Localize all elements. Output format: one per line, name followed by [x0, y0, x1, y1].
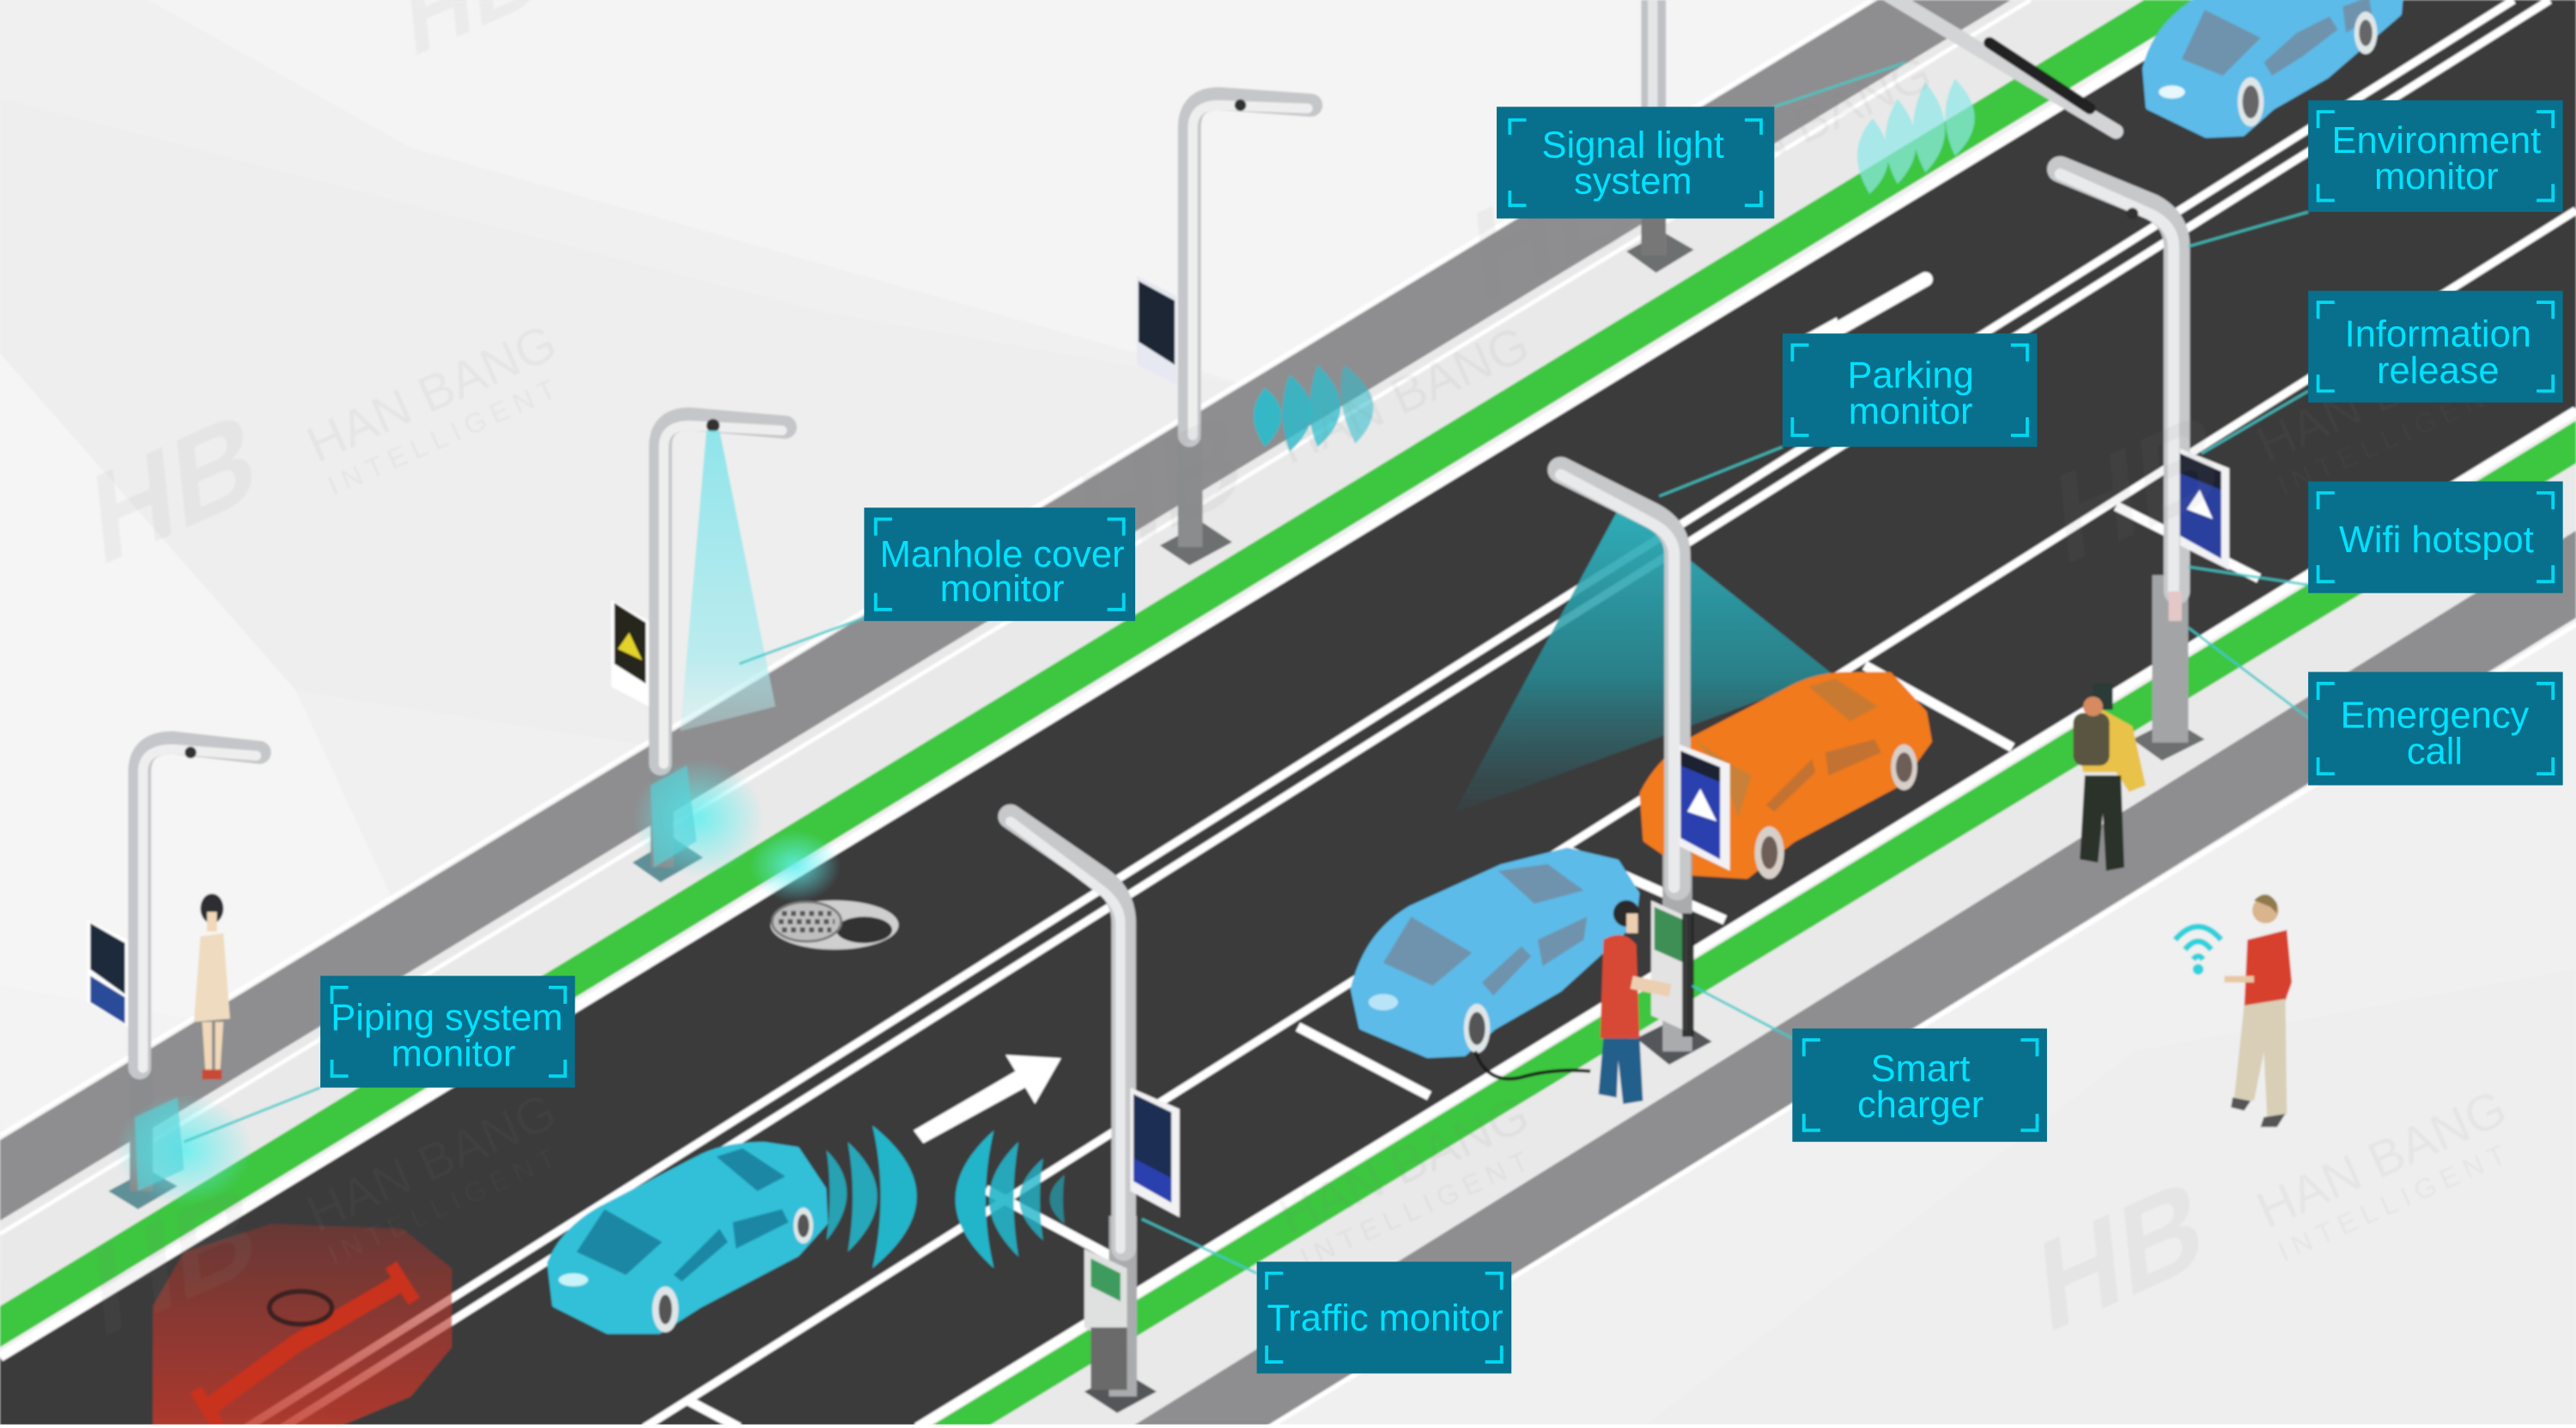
watermarks: INTELLIGENT: [1296, 1143, 1539, 1273]
label: information release: [2308, 291, 2563, 403]
blue car: top: [2146, 0, 2402, 135]
label: manhole cover monitor: monitor: [940, 568, 1064, 610]
label: piping system monitor: monitor: [392, 1034, 515, 1075]
watermarks: HB: [87, 380, 262, 594]
waves: upper pole: [1254, 365, 1373, 452]
signal light arm: [1886, 0, 2116, 131]
label: signal light system: Signal light: [1542, 125, 1724, 167]
label: signal light system: system: [1574, 161, 1692, 203]
lower road edge line: [917, 410, 2576, 1428]
watermarks: HB: [2050, 380, 2225, 594]
teal moving car: [550, 1145, 824, 1333]
connector lines: [184, 63, 2308, 1273]
label: emergency call: Emergency: [2341, 696, 2530, 737]
watermarks: HB: [2033, 1147, 2208, 1361]
label: smart charger: [1792, 1029, 2047, 1142]
label: parking monitor: monitor: [1849, 392, 1973, 433]
label: wifi hotspot: Wifi hotspot: [2339, 520, 2534, 561]
smart charger: [1651, 900, 1694, 1036]
waves: teal car: [826, 1126, 917, 1268]
upper grey walkway: [0, 0, 2011, 1221]
street pole 1: [87, 743, 259, 1209]
lower green strip: [928, 421, 2576, 1428]
street pole 2: [611, 419, 786, 882]
charger: pole 7: [1084, 1249, 1127, 1390]
street pole 5: [2060, 169, 2205, 761]
watermarks: HAN BANG: [1271, 314, 1537, 475]
waves: signal light: [1857, 79, 1975, 194]
person: charging man: [1599, 900, 1672, 1104]
blue parked car: [1354, 851, 1637, 1054]
label: emergency call: call: [2407, 732, 2463, 773]
label: wifi hotspot: [2308, 482, 2563, 593]
label: information release: release: [2377, 350, 2499, 392]
watermarks: HAN BANG: [1271, 1085, 1537, 1246]
watermarks: INTELLIGENT: [2274, 1136, 2517, 1267]
orange parked car: [1643, 675, 1929, 879]
label: smart charger: charger: [1857, 1085, 1984, 1126]
label: piping system monitor: Piping system: [331, 998, 563, 1039]
label: smart charger: Smart: [1871, 1048, 1971, 1090]
red pipe zone: [153, 1224, 452, 1428]
watermarks: HAN BANG: [1674, 43, 1940, 204]
label: signal light system: [1497, 106, 1774, 218]
waves: roadside sensor: [956, 1130, 1065, 1268]
label: manhole cover monitor: [864, 507, 1135, 621]
watermarks: HB: [1467, 117, 1642, 331]
label: manhole cover monitor: Manhole cover: [880, 534, 1125, 575]
lower walkway edge line: [1268, 624, 2576, 1428]
label: parking monitor: Parking: [1848, 355, 1974, 397]
icon: wifi: [2175, 927, 2221, 972]
manhole cover: [770, 900, 899, 950]
watermarks: HB: [87, 1152, 262, 1366]
bottom edge strip: [0, 1425, 2576, 1428]
watermarks: HAN BANG: [2248, 1079, 2515, 1239]
label: information release: Information: [2345, 314, 2531, 355]
watermarks: INTELLIGENT: [324, 1139, 567, 1271]
watermarks: HAN BANG: [2248, 313, 2515, 473]
label: environment monitor: monitor: [2374, 156, 2499, 197]
arrow: lower lane: [914, 1054, 1061, 1144]
person: woman: [194, 894, 230, 1079]
arrow: upper lane: [1804, 279, 1925, 338]
charging cable: [1475, 1051, 1590, 1079]
glow: piping sensor on pole 1: [115, 1094, 253, 1206]
label: parking monitor: [1783, 333, 2037, 447]
person: man with backpack: [2074, 684, 2146, 871]
person: man with phone: [2225, 895, 2292, 1127]
upper sidewalk: [0, 0, 2144, 1306]
watermarks: HAN BANG: [298, 313, 564, 473]
info sign: pole 5: [2180, 448, 2229, 570]
lower sidewalk: [969, 444, 2576, 1428]
lower grey walkway: [1130, 531, 2576, 1428]
label: environment monitor: Environment: [2331, 120, 2541, 161]
label: traffic monitor: [1257, 1261, 1511, 1373]
street pole 6 shaft and arm: [1561, 470, 1712, 1065]
upper curb lines: [0, 0, 2031, 1234]
monitor cone: pole 2: [680, 430, 775, 731]
watermarks: INTELLIGENT: [2274, 371, 2517, 501]
watermarks: HAN BANG: [298, 1082, 564, 1243]
label: piping system monitor: [320, 975, 575, 1088]
watermarks: INTELLIGENT: [324, 371, 567, 501]
info sign: pole 6: [1679, 744, 1730, 871]
street pole 4: [1626, 0, 1694, 273]
label: emergency call: [2308, 672, 2563, 786]
manhole signal glow: [749, 829, 841, 902]
street pole 7: [1011, 817, 1157, 1413]
label: environment monitor: [2308, 100, 2563, 212]
glow: manhole sensor on pole 2: [633, 759, 764, 878]
label: traffic monitor: Traffic monitor: [1267, 1298, 1503, 1340]
info sign: pole 7: [1130, 1088, 1180, 1218]
watermarks: HB: [1072, 380, 1248, 594]
street pole 3: [1137, 99, 1311, 565]
monitor cone: pole 6: [1454, 509, 1832, 813]
